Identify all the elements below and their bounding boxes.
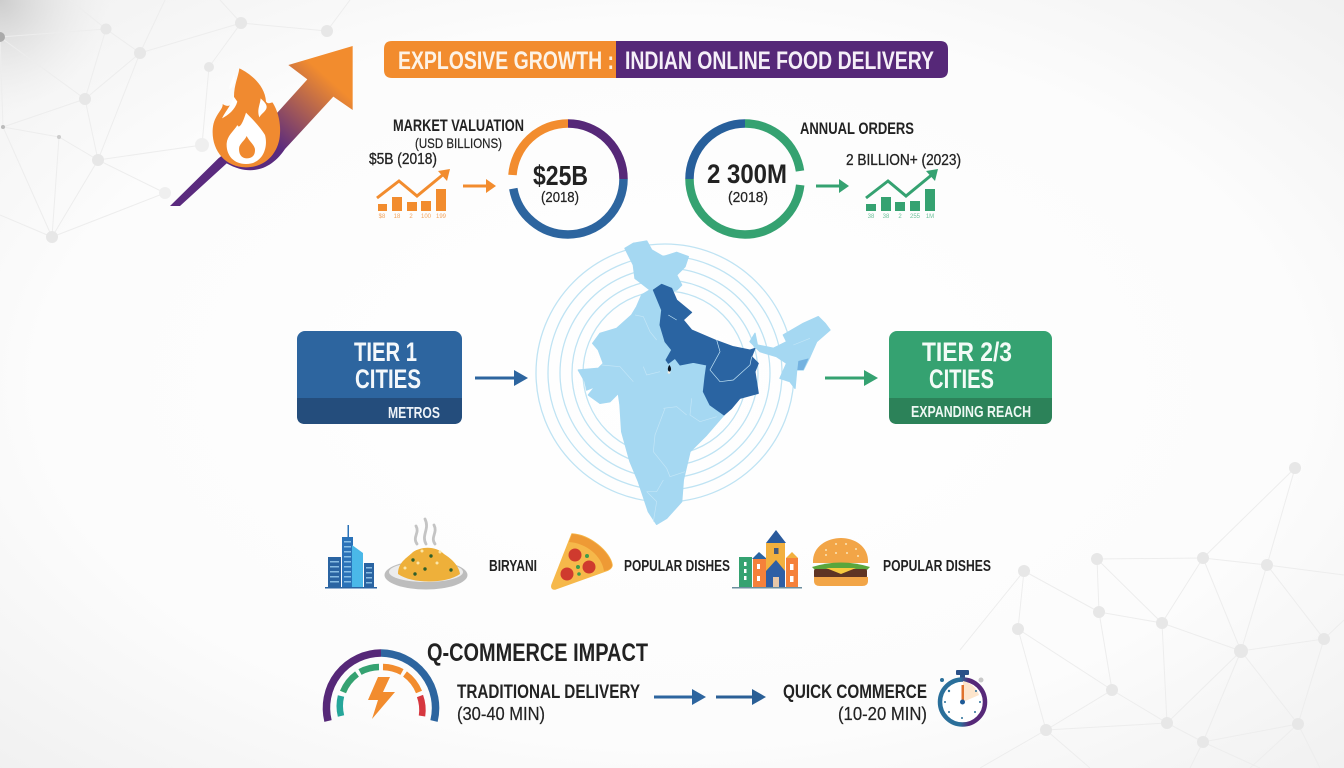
chart: market growth: 2 (409, 214, 413, 220)
panel: tier 2/3 cities (889, 331, 1052, 424)
arrow: tier 1 to map (475, 370, 528, 386)
title banner: EXPLOSIVE GROWTH : (398, 47, 614, 75)
popular dishes label 2: POPULAR DISHES (883, 558, 991, 575)
orders year: (2018) (728, 189, 768, 206)
panel: tier 2/3 cities: EXPANDING REACH (911, 404, 1031, 421)
map: India with radiating rings (536, 241, 830, 524)
valuation year: (2018) (541, 189, 579, 206)
traditional delivery time: (30-40 MIN) (457, 704, 545, 724)
icon: stopwatch (940, 670, 985, 724)
panel: tier 1 cities: METROS (388, 405, 440, 422)
arrow: to valuation (463, 179, 496, 193)
arrow: to orders (816, 179, 849, 193)
2023 value: 2 BILLION+ (2023) (846, 152, 961, 169)
chart: market growth: 100 (421, 214, 432, 220)
icon: pizza slice (552, 534, 612, 589)
chart: market growth: $8 (379, 214, 386, 220)
arrow: map to tier 2/3 (825, 370, 878, 386)
popular dishes label: POPULAR DISHES (624, 558, 730, 575)
chart: orders growth: 38 (883, 214, 890, 220)
panel: tier 1 cities (297, 331, 462, 424)
biryani label: BIRYANI (489, 558, 537, 575)
orders heading: ANNUAL ORDERS (800, 120, 914, 138)
quick commerce time: (10-20 MIN) (838, 704, 927, 724)
flame (213, 68, 280, 167)
panel: tier 1 cities: CITIES (355, 364, 421, 394)
title banner (384, 41, 948, 78)
icon: burger (812, 538, 870, 586)
orders value: 2 300M (707, 159, 787, 189)
chart: market growth (377, 169, 450, 220)
chart: orders growth: 2 (898, 214, 902, 220)
chart: orders growth (866, 169, 938, 220)
traditional delivery label: TRADITIONAL DELIVERY (457, 682, 640, 703)
arrow: speed 2 (716, 689, 766, 705)
chart: orders growth: 38 (868, 214, 875, 220)
icon: small town buildings (732, 530, 802, 588)
donut: valuation (512, 123, 624, 235)
chart: orders growth: 255 (910, 214, 921, 220)
chart: market growth: 199 (436, 214, 447, 220)
panel: annual orders (690, 120, 961, 234)
2018 value: $5B (2018) (369, 151, 437, 168)
panel: market valuation (369, 117, 624, 235)
icon: biryani plate (384, 519, 468, 590)
icon: city skyscrapers (325, 525, 377, 588)
q-commerce heading: Q-COMMERCE IMPACT (427, 639, 648, 667)
panel: tier 1 cities: TIER 1 (354, 337, 417, 367)
arrow: speed 1 (654, 689, 706, 705)
chart: market growth: 18 (394, 214, 401, 220)
icon: speed gauge (326, 653, 436, 721)
growth arrow (170, 46, 353, 206)
title banner: INDIAN ONLINE FOOD DELIVERY (625, 47, 934, 75)
valuation value: $25B (533, 160, 588, 191)
icon: flame on rising arrow (170, 46, 353, 206)
panel: tier 2/3 cities: CITIES (929, 364, 994, 394)
quick commerce label: QUICK COMMERCE (783, 682, 927, 703)
donut: orders (690, 123, 800, 234)
panel: tier 2/3 cities: TIER 2/3 (922, 337, 1012, 367)
chart: orders growth: 1M (926, 214, 934, 220)
market valuation heading: MARKET VALUATION (393, 117, 524, 135)
market valuation unit: (USD BILLIONS) (415, 135, 502, 151)
